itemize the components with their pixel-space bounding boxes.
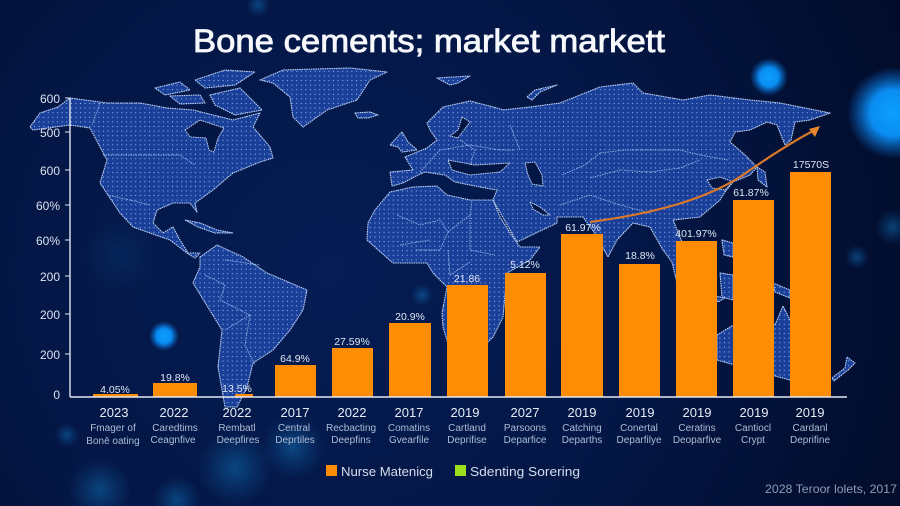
category labels: Ceagnfive <box>150 435 196 446</box>
map: iceland <box>355 112 378 118</box>
y axis: 60% <box>36 199 60 213</box>
map: greenland <box>260 68 387 127</box>
bars <box>93 172 831 397</box>
category labels: Rembatl <box>218 423 256 434</box>
bar value labels: 13.5% <box>222 383 252 395</box>
category labels: Crypt <box>741 435 765 446</box>
category labels: Conertal <box>620 423 658 434</box>
year labels: 2027 <box>511 405 539 420</box>
year labels: 2019 <box>626 405 654 420</box>
map: australia <box>717 306 815 380</box>
category labels: Gvearfile <box>389 435 429 446</box>
bar value labels: 17570S <box>793 159 829 171</box>
y axis: 60% <box>36 234 60 248</box>
category labels: Deprifine <box>790 435 830 446</box>
year labels: 2023 <box>100 405 128 420</box>
year labels: 2017 <box>395 405 423 420</box>
category labels: Deparfilye <box>616 435 662 446</box>
category labels: Ceratins <box>678 423 716 434</box>
category labels: Cartland <box>448 423 486 434</box>
category labels: Parsoons <box>504 423 546 434</box>
bar value labels: 61.87% <box>733 187 769 199</box>
map: southeast asia islands <box>715 240 790 302</box>
map: svalbard <box>437 76 470 85</box>
y axis: 200 <box>40 348 60 362</box>
category labels: Deparths <box>562 435 602 446</box>
year labels: 2019 <box>740 405 768 420</box>
category labels: Recbacting <box>326 423 376 434</box>
map: eurasia <box>390 83 830 283</box>
category labels: Cardanl <box>792 423 828 434</box>
bar value labels: 27.59% <box>334 336 370 348</box>
year labels: 2019 <box>568 405 596 420</box>
x axis <box>70 396 847 398</box>
bar value labels: 19.8% <box>160 372 190 384</box>
category labels: Bonē oating <box>86 436 140 447</box>
year labels: 2022 <box>338 405 366 420</box>
source note: 2028 Teroor lolets, 2017 <box>765 482 897 496</box>
map: hudson bay <box>185 120 224 152</box>
map: japan <box>757 167 767 187</box>
year labels <box>100 405 824 420</box>
map: novaya zemlya <box>527 85 557 100</box>
year labels: 2022 <box>223 405 251 420</box>
category labels: Deepfires <box>217 435 259 446</box>
y axis <box>36 92 70 402</box>
category labels: Deprifise <box>447 435 487 446</box>
category labels: Deoparfive <box>673 435 722 446</box>
bar value labels: 61.97% <box>565 222 601 234</box>
year labels: 2019 <box>451 405 479 420</box>
category labels: Deepfins <box>331 435 371 446</box>
category labels: Fmager of <box>90 423 136 434</box>
bar value labels: 18.8% <box>625 250 655 262</box>
bar value labels: 20.9% <box>395 311 425 323</box>
map: north america <box>30 98 273 258</box>
map: internal borders <box>92 103 728 365</box>
map: britain <box>390 132 417 152</box>
year labels: 2017 <box>281 405 309 420</box>
year labels: 2019 <box>683 405 711 420</box>
bar value labels: 5.12% <box>510 259 540 271</box>
bar value labels: 64.9% <box>280 353 310 365</box>
map: arctic islands <box>155 70 262 115</box>
legend <box>326 464 580 479</box>
year labels: 2019 <box>796 405 824 420</box>
category labels: Deparfice <box>504 435 547 446</box>
year labels: 2022 <box>160 405 188 420</box>
y axis: 500 <box>40 126 60 140</box>
bar value labels: 401.97% <box>675 228 717 240</box>
category labels: Caredtims <box>152 423 198 434</box>
category labels: Cantiocl <box>735 423 771 434</box>
y axis: 600 <box>40 164 60 178</box>
category labels: Deprtiles <box>275 435 315 446</box>
map: cuba and caribbean <box>185 220 233 233</box>
y axis: 600 <box>40 92 60 106</box>
category labels: Catching <box>562 423 602 434</box>
map: new zealand <box>832 357 855 381</box>
trend arrow <box>590 126 820 222</box>
map: south america <box>193 245 307 407</box>
map: inland seas <box>448 117 733 215</box>
bar value labels: 21.86 <box>454 273 480 285</box>
y axis: 200 <box>40 270 60 284</box>
category labels <box>86 423 830 447</box>
bar value labels: 4.05% <box>100 384 130 396</box>
legend: Nurse Matenicg <box>341 464 433 479</box>
y axis: 200 <box>40 308 60 322</box>
title: Bone cements; market markett <box>193 23 665 59</box>
world map <box>30 68 855 407</box>
map: africa <box>367 186 540 370</box>
y axis: 0 <box>53 388 60 402</box>
bar value labels <box>100 159 829 396</box>
category labels: Central <box>278 423 310 434</box>
category labels: Comatins <box>388 423 430 434</box>
legend: Sdenting Sorering <box>470 464 580 479</box>
